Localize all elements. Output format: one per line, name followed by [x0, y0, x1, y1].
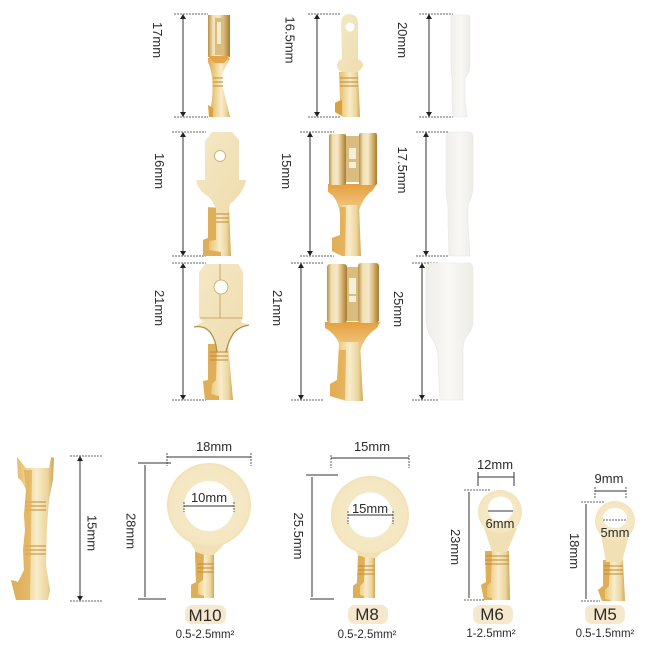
dimension: 16.5mm: 16.5mm	[282, 17, 298, 63]
label: M5: M5	[593, 605, 617, 624]
dimension: M8	[291, 439, 409, 599]
dimension: M6: 12mm	[477, 457, 513, 472]
dimension: M8: 15mm	[352, 501, 388, 516]
dimension: 17mm: 17mm	[150, 22, 165, 58]
dimension: M10: 10mm	[191, 490, 227, 505]
dimension: 16.5mm	[282, 14, 341, 117]
terminal: butt connector	[11, 457, 54, 600]
dimension: M8: 25.5mm	[291, 513, 306, 559]
terminal: medium male tab	[196, 132, 246, 256]
dimension: 25mm	[391, 263, 438, 400]
dimension: M10	[124, 439, 251, 599]
terminal: M5 ring	[595, 501, 635, 601]
dimension: M5: 9mm	[595, 471, 623, 486]
dimension: M6: 6mm	[486, 516, 514, 531]
dimension: 17.5mm	[395, 132, 449, 256]
dimension: butt connector 15mm: 15mm	[84, 515, 100, 551]
dimension: 25mm: 25mm	[391, 291, 406, 327]
dimension: 15mm: 15mm	[279, 153, 294, 189]
label: M6: M6	[480, 605, 504, 624]
dimension: M6	[448, 457, 514, 600]
terminal: medium female	[328, 133, 377, 256]
dimension: M6: 23mm	[448, 529, 463, 565]
dimension: 21mm left: 21mm	[152, 290, 167, 326]
dimension: 21mm right	[270, 263, 324, 400]
terminal: M6 ring	[478, 490, 522, 600]
dimension: M8: 15mm	[354, 439, 390, 454]
label: M10	[176, 605, 235, 641]
cap: medium clear insulator	[446, 132, 473, 256]
dimension: 21mm right: 21mm	[270, 290, 285, 326]
cap: large clear insulator	[426, 263, 473, 400]
dimension: M5: 18mm	[567, 533, 582, 569]
terminal: M8 ring	[331, 476, 409, 598]
terminal: small male with hole	[335, 14, 363, 117]
dimension: M10: 18mm	[196, 439, 232, 454]
label: M6	[466, 605, 516, 640]
label: M8: 0.5-2.5mm²	[338, 629, 397, 641]
dimension: 21mm left	[152, 263, 206, 400]
terminal: M10 ring	[167, 463, 251, 598]
label: M10: M10	[188, 606, 222, 625]
label: M10: 0.5-2.5mm²	[176, 629, 235, 641]
terminal: large female	[325, 263, 380, 401]
dimension: 17mm	[150, 14, 208, 117]
label: M8	[338, 605, 397, 641]
label: M5: 0.5-1.5mm²	[576, 628, 635, 640]
label: M8: M8	[355, 605, 379, 624]
cap: small clear insulator	[451, 15, 470, 117]
dimension: 20mm	[395, 14, 453, 117]
dimension: 16mm	[152, 132, 206, 256]
dimension: 20mm: 20mm	[395, 22, 410, 58]
terminal: small female	[208, 15, 230, 117]
dimension: 15mm	[279, 132, 334, 256]
dimension: 16mm: 16mm	[152, 153, 167, 189]
label: M6: 1-2.5mm²	[466, 628, 516, 640]
dimension: butt connector 15mm	[70, 456, 103, 601]
dimension: M10: 28mm	[124, 513, 138, 549]
dimension: M5: 5mm	[601, 525, 629, 540]
dimension: M5	[567, 471, 629, 601]
terminal: large male tab	[194, 264, 249, 400]
label: M5	[576, 605, 635, 640]
dimension: 17.5mm: 17.5mm	[395, 147, 410, 193]
